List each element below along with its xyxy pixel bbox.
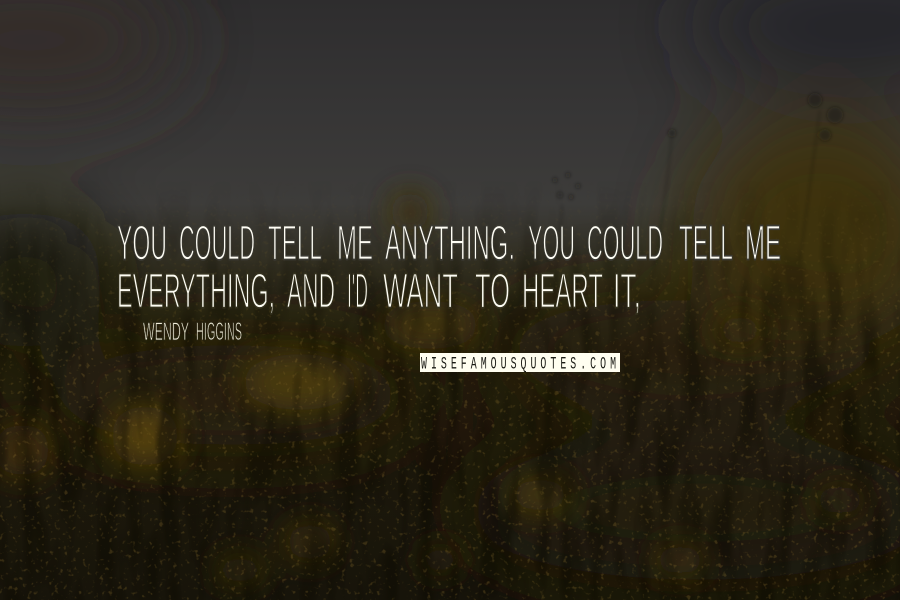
quote line 1: ME [337,217,373,271]
quote line 1: ANYTHING. [385,217,515,271]
quote line 1: TELL [268,217,322,271]
quote line 1: YOU [117,217,167,271]
author name: WENDY [143,318,189,346]
quote text [117,217,781,318]
quote line 2: I'D [347,264,368,318]
distant flower stems [552,93,843,300]
quote line 2: TO [475,264,510,318]
quote line 2 [117,264,641,318]
quote line 2: IT, [613,264,641,318]
quote line 1: COULD [179,217,255,271]
quote line 1: TELL [679,217,733,271]
quote line 2: HEART [522,264,603,318]
quote poster: ME [745,217,781,271]
quote line 1: YOU [528,217,575,271]
quote line 2: EVERYTHING, [117,264,275,318]
meadow texture [0,234,900,600]
watermark logo: WISEFAMOUSQUOTES.COM [421,355,620,375]
quote line 1: COULD [587,217,663,271]
quote line 2: WANT [383,264,458,318]
quote line 2: AND [287,264,335,318]
quote line 1 [117,217,781,271]
quote poster: HIGGINS [196,318,242,346]
